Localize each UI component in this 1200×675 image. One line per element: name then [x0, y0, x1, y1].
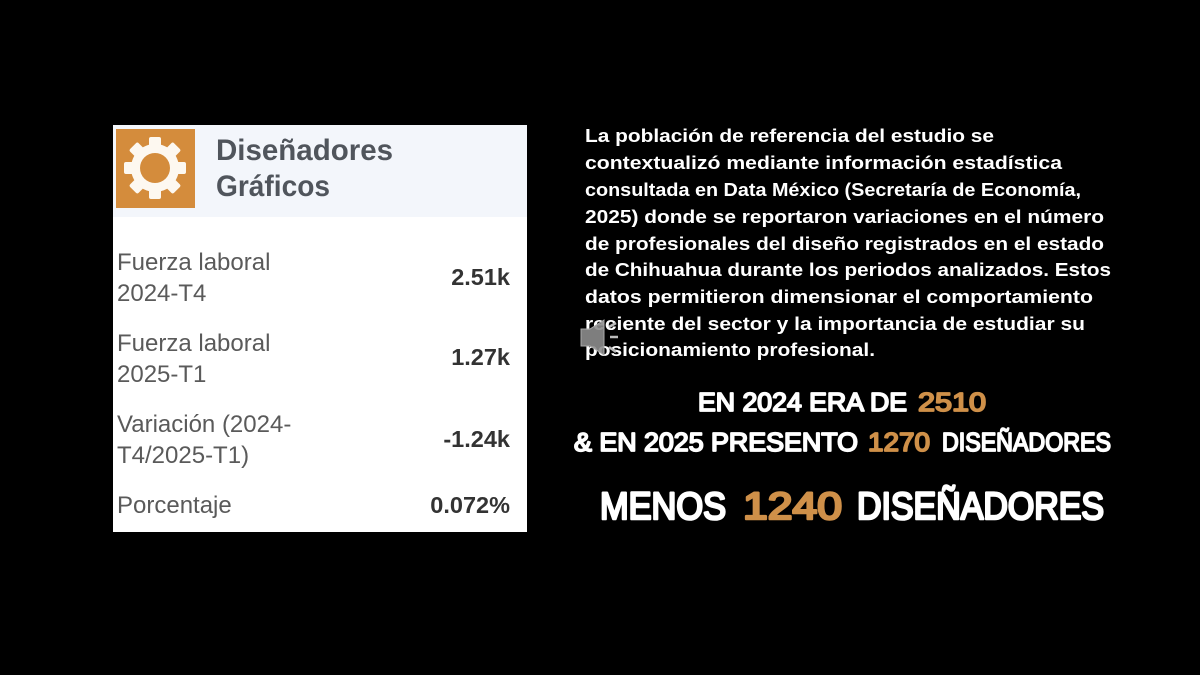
callout: 2025 figure: [574, 427, 1111, 457]
callout: 2025 figure: DISEÑADORES: [942, 427, 1111, 457]
row: fuerza laboral 2024-T4: Fuerza laboral: [117, 249, 270, 276]
row: fuerza laboral 2025-T1: [117, 330, 511, 388]
paragraph text: reciente del sector y la importancia de estudiar su: [585, 313, 1085, 334]
row: porcentaje: [117, 492, 510, 519]
callout: 2024 figure: 2510: [918, 387, 986, 417]
row: fuerza laboral 2025-T1: 2025-T1: [117, 361, 206, 388]
callout: 2025 figure: 1270: [868, 427, 930, 457]
callout: difference: 1240: [743, 486, 842, 528]
callout: 2024 figure: EN 2024 ERA DE: [698, 387, 907, 417]
paragraph text: datos permitieron dimensionar el comportamiento: [585, 286, 1093, 307]
paragraph text: 2025) donde se reportaron variaciones en el número: [585, 206, 1104, 227]
heading: Gráficos: [216, 170, 330, 203]
row: variación: Variación (2024-: [117, 411, 291, 438]
callout: difference: [600, 485, 1104, 528]
callout: difference: MENOS: [600, 486, 726, 528]
paragraph text: La población de referencia del estudio se: [585, 125, 994, 146]
paragraph text: de profesionales del diseño registrados en el estado: [585, 233, 1104, 254]
heading: Diseñadores: [216, 134, 393, 167]
row: porcentaje: Porcentaje: [117, 492, 232, 519]
row: variación: T4/2025-T1): [117, 442, 249, 469]
row: fuerza laboral 2025-T1: 1.27k: [451, 344, 511, 370]
paragraph text: de Chihuahua durante los periodos analizados. Estos: [585, 259, 1111, 280]
panel: data card: [113, 125, 527, 532]
icon: speaker: [581, 320, 618, 355]
callout: difference: DISEÑADORES: [857, 485, 1104, 528]
icon: gear: [116, 129, 195, 208]
card header: [113, 125, 527, 217]
row: fuerza laboral 2025-T1: Fuerza laboral: [117, 330, 270, 357]
row: variación: [117, 411, 511, 469]
row: fuerza laboral 2024-T4: 2024-T4: [117, 280, 206, 307]
row: fuerza laboral 2024-T4: 2.51k: [451, 264, 511, 290]
paragraph text: [585, 125, 1111, 360]
callout: 2025 figure: & EN 2025 PRESENTO: [574, 427, 858, 457]
paragraph text: contextualizó mediante información estadística: [585, 152, 1063, 173]
paragraph text: posicionamiento profesional.: [585, 339, 875, 360]
row: porcentaje: 0.072%: [430, 492, 510, 518]
row: variación: -1.24k: [443, 426, 511, 452]
paragraph text: consultada en Data México (Secretaría de Economía,: [585, 179, 1081, 200]
row: fuerza laboral 2024-T4: [117, 249, 511, 307]
